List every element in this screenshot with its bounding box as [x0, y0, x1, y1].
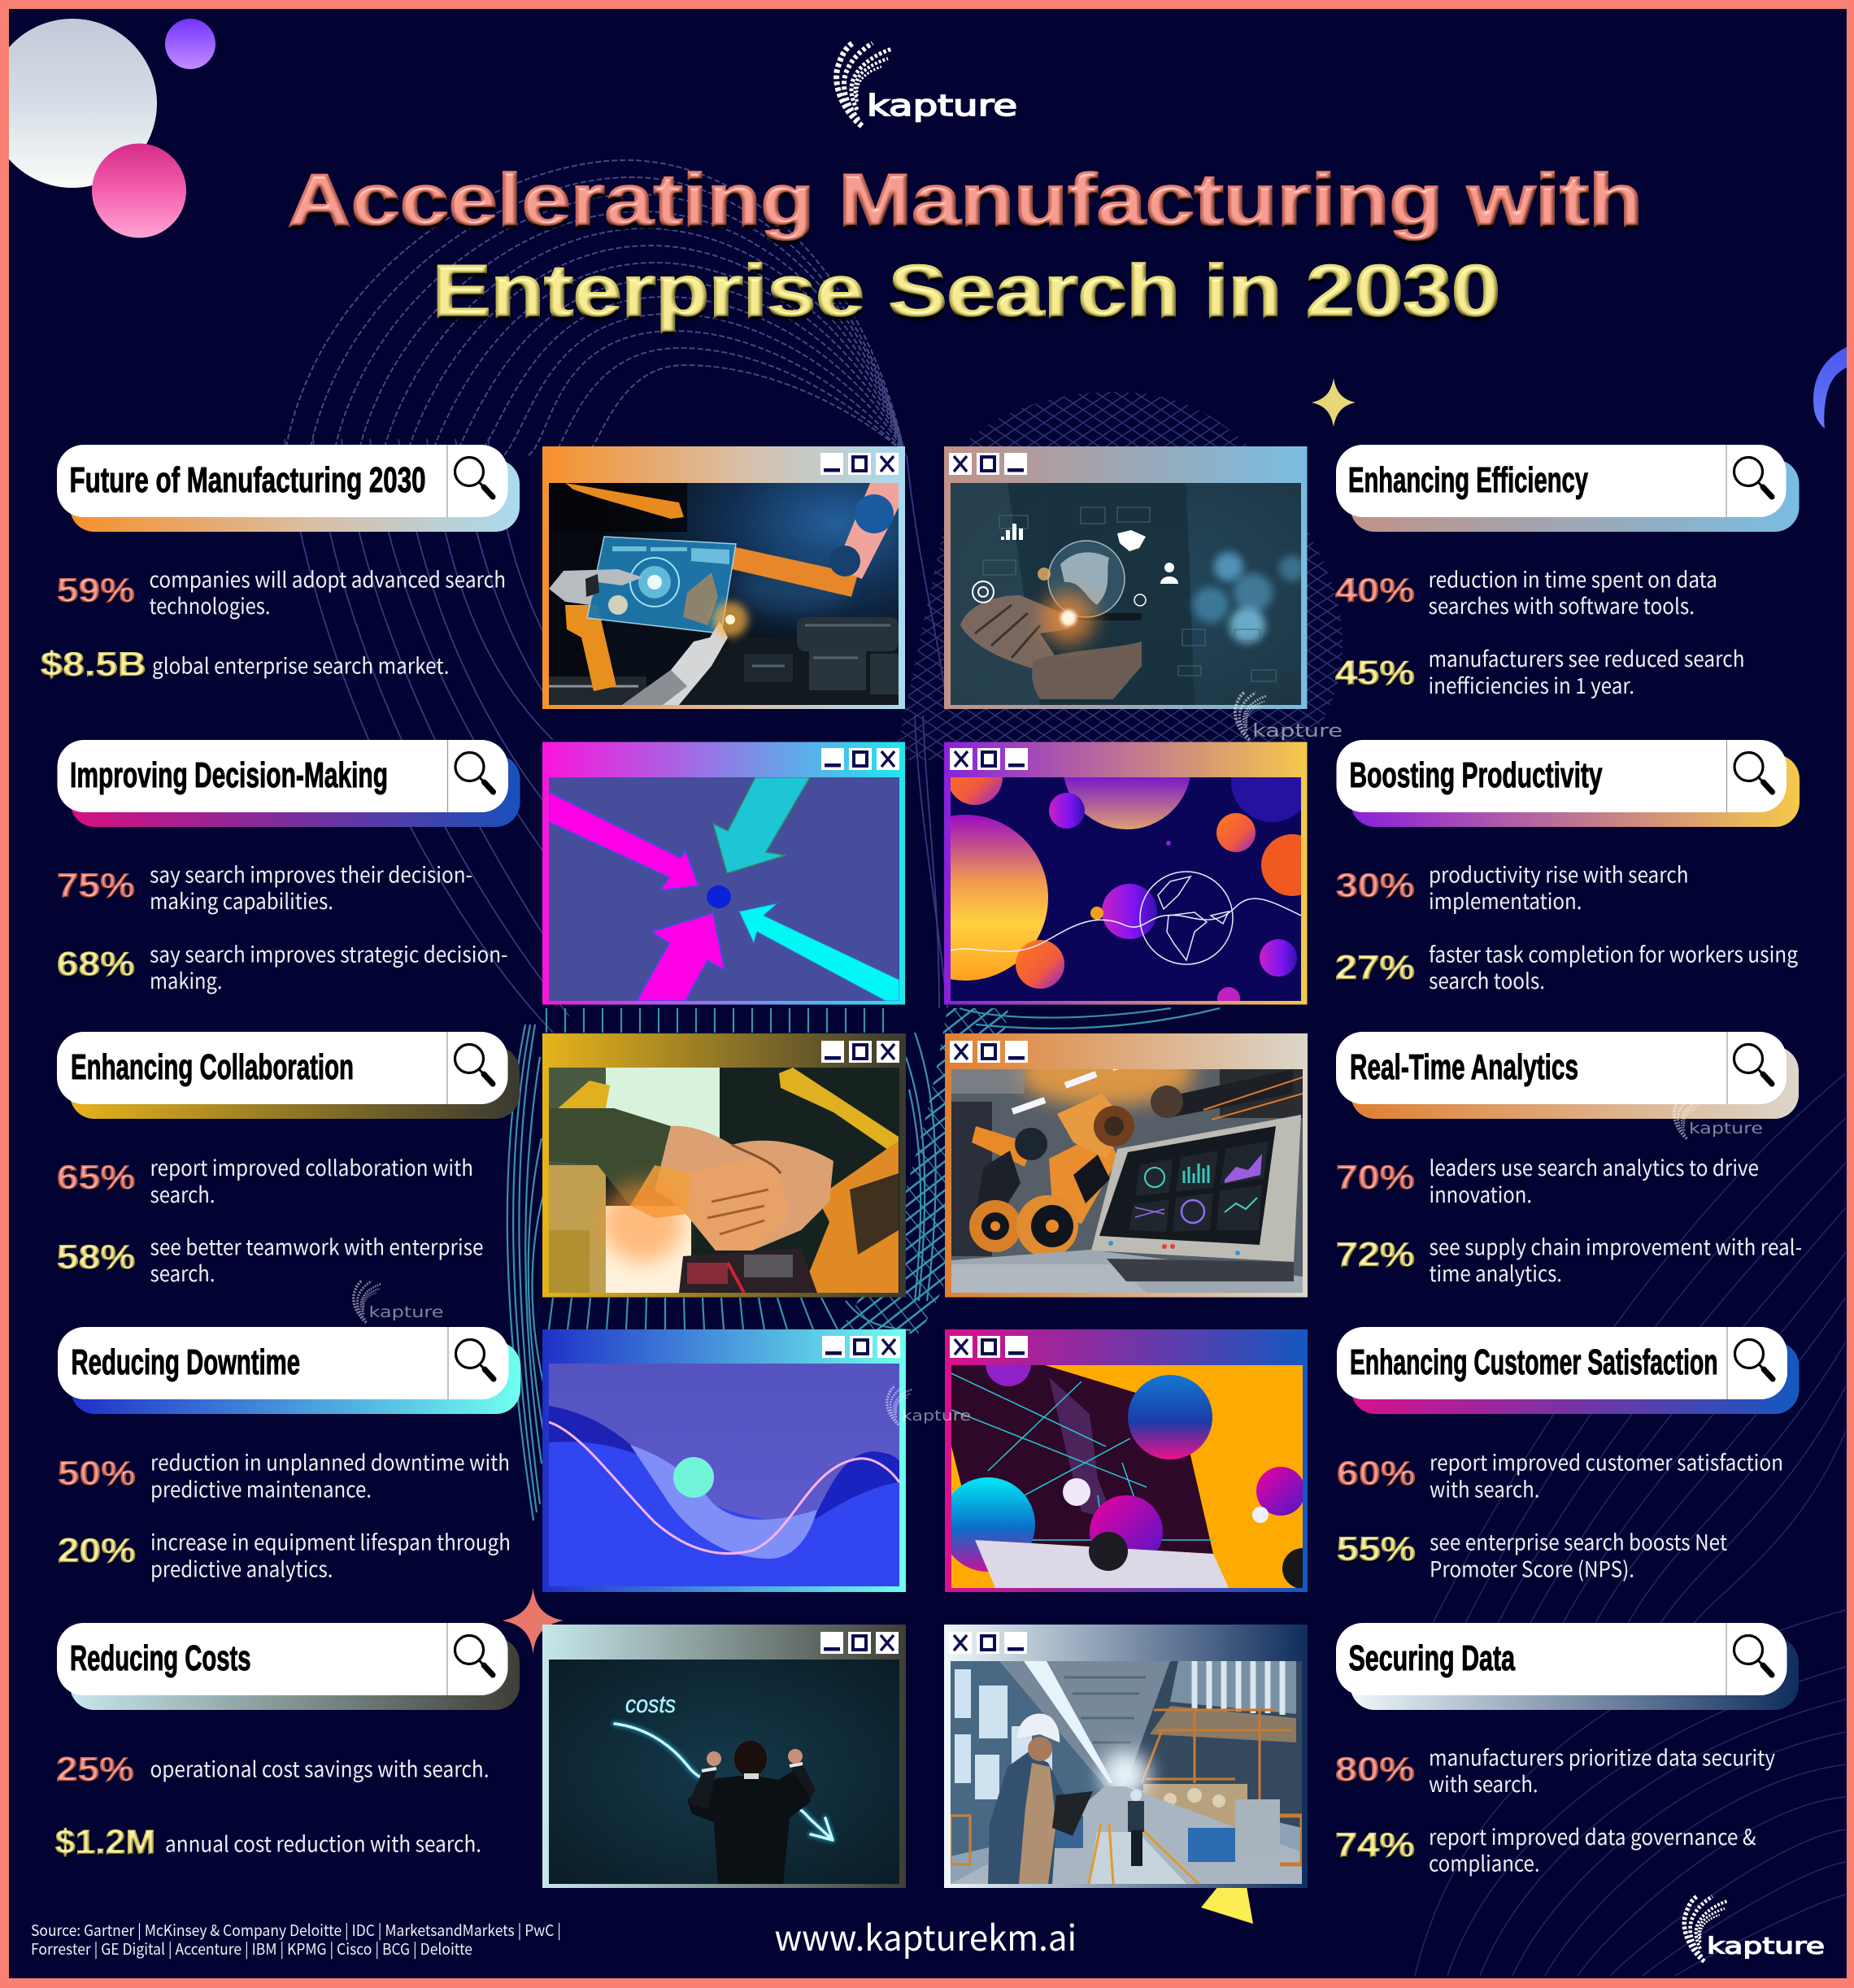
window buttons	[820, 1632, 899, 1654]
businessman	[687, 1741, 816, 1884]
stat: $1.2M	[55, 1823, 481, 1862]
stat: 58%: see better teamwork with enterprise	[150, 1229, 483, 1262]
stat: 50%	[58, 1446, 510, 1504]
stat: 74%: compliance.	[1429, 1846, 1540, 1878]
globe	[1140, 872, 1233, 964]
window panel: robots and analytics monitor	[945, 1033, 1308, 1298]
icon: bar chart	[1001, 524, 1023, 540]
search bar	[1337, 1327, 1799, 1414]
stat: 80%: manufacturers prioritize data security	[1429, 1740, 1775, 1773]
stat: 27%: 27%	[1335, 949, 1415, 988]
stat: 45%: manufacturers see reduced search	[1428, 642, 1745, 673]
stat: 45%: inefficiencies in 1 year.	[1428, 668, 1634, 700]
watermark: logo near real-time analytics	[1674, 1097, 1763, 1138]
watermark: logo near real-time analytics: kapture	[1689, 1120, 1763, 1138]
window panel: robot and holographic tablet	[542, 446, 905, 709]
stat: 27%: faster task completion for workers using	[1429, 937, 1798, 969]
search bar	[57, 1623, 520, 1710]
stat: 40%: 40%	[1335, 572, 1415, 611]
distant worker	[1128, 1790, 1144, 1866]
stat: 65%	[57, 1151, 473, 1209]
stat: 58%	[57, 1229, 483, 1288]
icon: handshake	[1117, 530, 1146, 551]
stat: 50%: predictive maintenance.	[150, 1472, 372, 1504]
stat: 72%: see supply chain improvement with real-	[1430, 1229, 1802, 1262]
stat: 40%	[1335, 563, 1717, 620]
title line 1: Accelerating Manufacturing with	[288, 159, 1643, 242]
monitor	[1091, 1115, 1301, 1281]
section: Enhancing Efficiency	[1335, 445, 1799, 700]
window panel: 3D spheres on tilted screen	[941, 1329, 1323, 1592]
stat: $1.2M: annual cost reduction with search.	[165, 1826, 481, 1859]
table	[951, 1250, 1303, 1293]
watermark: logo center: kapture	[902, 1407, 971, 1425]
decorative circle: pink	[92, 143, 186, 237]
search bar: Real-Time Analytics	[1350, 1047, 1578, 1087]
stat: 65%: search.	[150, 1177, 215, 1209]
search bar: Reducing Downtime	[72, 1342, 300, 1382]
search bar: Reducing Costs	[70, 1638, 251, 1678]
stat: 40%: searches with software tools.	[1428, 589, 1695, 620]
window buttons	[821, 748, 899, 770]
window buttons	[949, 1632, 1027, 1654]
stat: 60%: report improved customer satisfaction	[1430, 1446, 1783, 1477]
stat: 27%	[1335, 937, 1798, 995]
stat: 55%	[1337, 1525, 1727, 1584]
stat: 72%: 72%	[1336, 1236, 1415, 1275]
watermark: logo center	[887, 1386, 971, 1425]
stat: 30%: implementation.	[1429, 884, 1582, 916]
stat: 58%: search.	[150, 1256, 215, 1288]
stat: 68%: say search improves strategic decision-	[150, 937, 507, 969]
stat: 30%: 30%	[1336, 867, 1415, 906]
stat: 72%: time analytics.	[1430, 1256, 1562, 1288]
stat: 30%	[1336, 857, 1688, 916]
stat: 58%: 58%	[57, 1238, 135, 1277]
stat: 60%: with search.	[1430, 1472, 1540, 1504]
section: Enhancing Collaboration	[57, 1032, 520, 1288]
background: mesh dome	[894, 392, 1343, 767]
stat: 20%: increase in equipment lifespan through	[150, 1525, 511, 1556]
stat: 60%: 60%	[1337, 1455, 1416, 1494]
stat: 72%	[1336, 1229, 1802, 1288]
stat: 55%: Promoter Score (NPS).	[1430, 1551, 1634, 1584]
window panel: gradient spheres and globe	[882, 701, 1323, 1010]
search bar: Future of Manufacturing 2030	[70, 460, 425, 500]
window panel: costs falling	[542, 1625, 906, 1888]
stat: 80%: 80%	[1335, 1751, 1415, 1790]
stat: 75%: 75%	[57, 867, 135, 906]
stat: 75%: say search improves their decision-	[150, 857, 472, 890]
watermark: logo near collaboration	[354, 1281, 444, 1322]
stat: 70%	[1336, 1151, 1759, 1209]
search bar: Improving Decision-Making	[70, 755, 388, 795]
window panel: engineer in factory	[944, 1625, 1308, 1888]
decorative circle: purple	[165, 19, 215, 69]
source note: Source: Gartner | McKinsey & Company Deloitte | IDC | MarketsandMarkets | PwC |	[31, 1919, 561, 1941]
stat: 59%: technologies.	[150, 589, 270, 620]
window buttons	[950, 1336, 1028, 1358]
stat: 45%: 45%	[1335, 654, 1415, 693]
stat: 27%: search tools.	[1429, 964, 1545, 995]
window buttons	[822, 1336, 900, 1358]
stat: $1.2M: $1.2M	[55, 1823, 156, 1862]
stat: 30%: productivity rise with search	[1429, 857, 1688, 890]
stat: 45%	[1335, 642, 1745, 700]
window panel: converging arrows	[542, 742, 905, 1005]
stat: 80%	[1335, 1740, 1775, 1799]
window buttons	[821, 1041, 899, 1063]
stat: 25%: 25%	[56, 1751, 134, 1790]
stat: 65%: report improved collaboration with	[150, 1151, 473, 1182]
section: Reducing Costs	[55, 1623, 520, 1862]
section: Securing Data	[1335, 1623, 1799, 1878]
stat: 25%	[56, 1751, 490, 1790]
window panel: hand holding phone with globe	[944, 446, 1308, 709]
website url: www.kapturekm.ai	[774, 1911, 1077, 1961]
source note	[31, 1919, 561, 1960]
stat: 25%: operational cost savings with search.	[150, 1751, 490, 1784]
section: Future of Manufacturing 2030	[41, 445, 520, 685]
stat: 70%: leaders use search analytics to drive	[1430, 1151, 1759, 1182]
window buttons	[950, 748, 1028, 770]
window buttons	[820, 453, 899, 475]
decorative crescent: blue	[1813, 346, 1850, 428]
decorative star: yellow	[1312, 378, 1356, 427]
stat: 20%: 20%	[58, 1532, 136, 1571]
title line 2: Enterprise Search in 2030	[433, 250, 1500, 333]
section: Real-Time Analytics	[1336, 1032, 1802, 1288]
search bar	[1337, 740, 1800, 827]
stat: 50%: reduction in unplanned downtime with	[150, 1446, 510, 1477]
stat: $8.5B: $8.5B	[41, 646, 146, 685]
icon: target	[973, 581, 994, 602]
stat: 68%: making.	[150, 964, 223, 995]
stat: $8.5B: global enterprise search market.	[152, 649, 449, 680]
engineer	[988, 1713, 1093, 1884]
stat: 70%: 70%	[1336, 1159, 1415, 1198]
background: flowing lines left	[285, 439, 947, 1033]
stat: 74%: report improved data governance &	[1429, 1820, 1756, 1851]
logo: bottom right: kapture	[1707, 1932, 1825, 1960]
decorative circle: white	[0, 19, 157, 188]
background: teal mesh	[507, 1008, 1220, 1520]
icon: person	[1160, 563, 1178, 584]
logo: top	[837, 42, 1017, 126]
title	[288, 159, 1643, 333]
decorative triangle: yellow	[1201, 1886, 1253, 1924]
search bar: Enhancing Collaboration	[71, 1047, 354, 1087]
stat: 40%: reduction in time spent on data	[1428, 563, 1717, 594]
window panel: handshake with robots	[542, 1033, 906, 1298]
costs label: costs	[625, 1691, 676, 1718]
stat: 68%	[57, 937, 507, 995]
stat: 65%: 65%	[57, 1159, 135, 1198]
section: Reducing Downtime	[58, 1327, 520, 1584]
robot arms	[969, 1069, 1303, 1257]
search bar	[58, 1327, 520, 1414]
search bar	[57, 445, 520, 532]
stat: 68%: 68%	[57, 945, 135, 984]
search bar: Boosting Productivity	[1350, 755, 1603, 795]
search bar: Enhancing Efficiency	[1348, 460, 1588, 500]
watermark: logo near collaboration: kapture	[369, 1303, 444, 1321]
stat: 50%: 50%	[58, 1455, 136, 1494]
stat: 59%: 59%	[57, 572, 135, 611]
watermark: logo near productivity: kapture	[1252, 721, 1343, 742]
logo: top: kapture	[867, 89, 1017, 123]
stat: 74%: 74%	[1335, 1826, 1415, 1865]
search bar	[1336, 1623, 1799, 1710]
background: faint right arcs	[1415, 1073, 1846, 1976]
stat: 74%	[1335, 1820, 1756, 1878]
decorative star: coral	[503, 1588, 564, 1654]
search bar	[57, 1032, 520, 1119]
stat: 59%	[57, 563, 506, 620]
section: Enhancing Customer Satisfaction	[1337, 1327, 1799, 1584]
stat: 59%: companies will adopt advanced search	[150, 563, 506, 594]
section: Boosting Productivity	[1335, 740, 1800, 995]
stat: 75%: making capabilities.	[150, 884, 333, 916]
window buttons	[950, 1041, 1028, 1063]
stat: 70%: innovation.	[1430, 1177, 1532, 1209]
falling curve	[615, 1724, 833, 1840]
stat: 20%: predictive analytics.	[150, 1551, 333, 1584]
stat: 55%: 55%	[1337, 1530, 1416, 1569]
search bar	[1336, 445, 1799, 532]
source note: Forrester | GE Digital | Accenture | IBM | KPMG | Cisco | BCG | Deloitte	[31, 1938, 472, 1960]
stat: 80%: with search.	[1429, 1767, 1538, 1799]
window panel: blue waves	[542, 1329, 906, 1592]
stat: 75%	[57, 857, 472, 916]
watermark: logo near productivity	[1235, 692, 1343, 742]
search bar	[57, 740, 520, 827]
background: dotted arcs	[285, 160, 905, 455]
stat: 55%: see enterprise search boosts Net	[1430, 1525, 1727, 1556]
window buttons	[949, 453, 1027, 475]
search bar: Securing Data	[1348, 1638, 1515, 1678]
stat: 60%	[1337, 1446, 1783, 1504]
search bar	[1336, 1032, 1799, 1119]
stat: 20%	[58, 1525, 511, 1584]
logo: bottom right	[1684, 1896, 1825, 1961]
stat: $8.5B	[41, 646, 449, 685]
section: Improving Decision-Making	[57, 740, 520, 995]
